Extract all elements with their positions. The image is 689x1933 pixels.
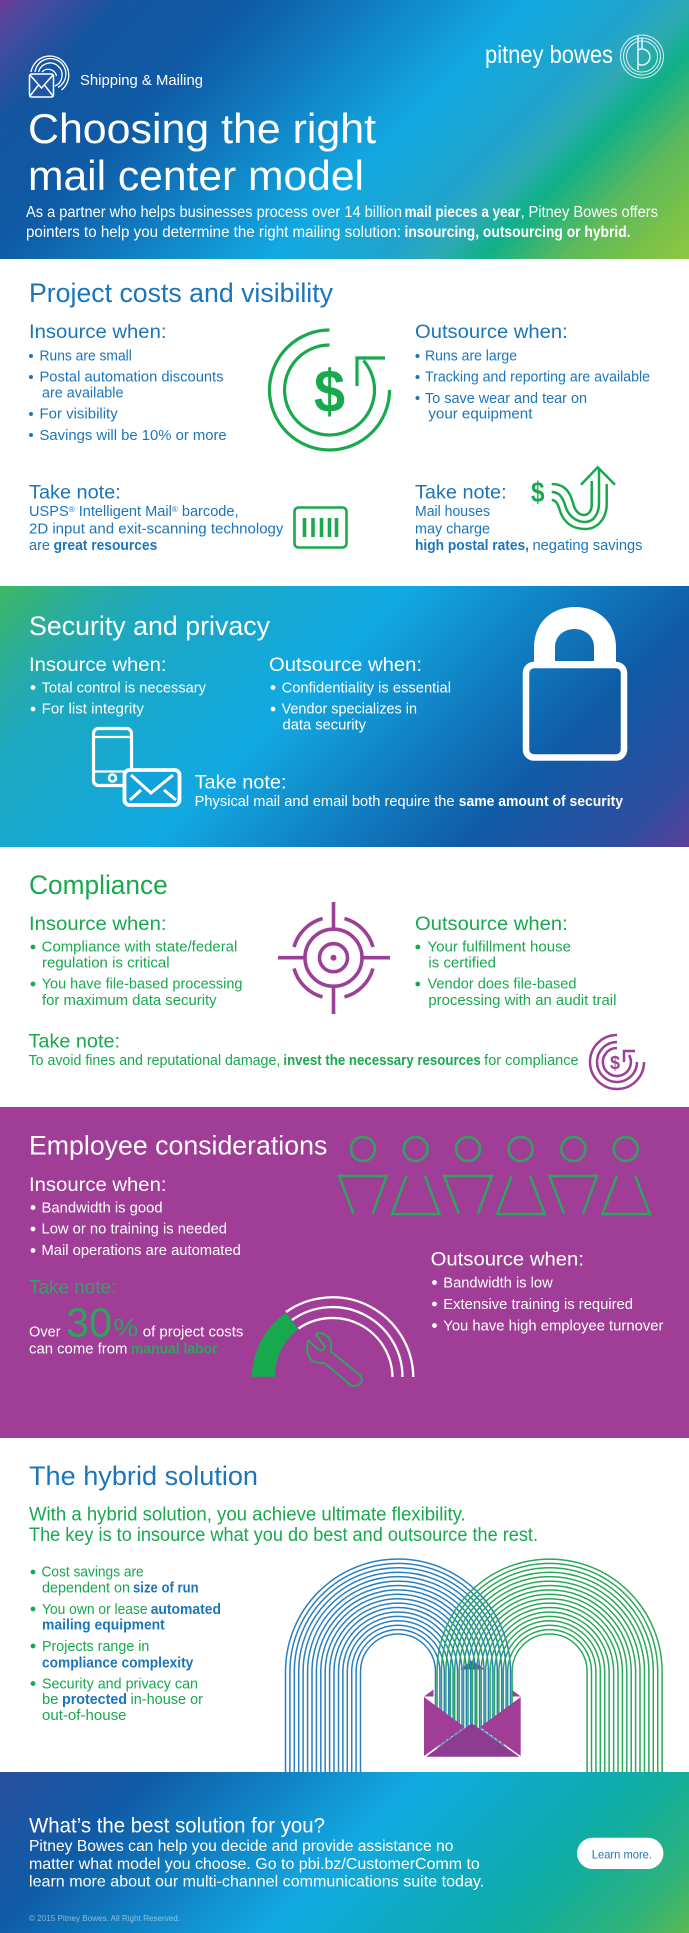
take note [195,771,623,810]
body text: learn more about our multi-channel communications suite today. [29,1874,484,1891]
intro text: As a partner who helps businesses process over 14 billion [26,204,402,221]
button: learn more [577,1838,663,1869]
take note: barcode: are [29,538,50,554]
take note: of project costs [143,1325,243,1341]
subheading [29,1505,538,1546]
insource column: Savings will be 10% or more [40,428,227,444]
insource column: For list integrity [42,702,145,718]
icon: envelope back flap [424,1660,521,1696]
take note: mail houses: may charge [415,521,490,537]
icon: dollar rings [590,1035,644,1089]
heading: Compliance [29,870,168,900]
take note: mail houses [415,482,642,554]
outsource column: Bandwidth is low [443,1275,553,1291]
take note: Take note: [29,1276,116,1298]
take note: barcode [29,482,284,554]
take note: mail houses: negating savings [532,538,642,554]
bullet list: size of run [133,1581,199,1597]
heading: The hybrid solution [29,1461,258,1491]
panel: header [0,0,689,259]
take note: Over [29,1325,61,1341]
take note: mail houses: high postal rates, [415,538,529,554]
outsource column: You have high employee turnover [443,1318,664,1334]
insource column: Insource when: [29,1174,166,1196]
take note: 30 [66,1300,112,1346]
title [28,105,376,199]
take note: barcode: Take note: [29,482,121,504]
insource column: Compliance with state/federal [42,940,237,956]
take note: mail houses: Mail houses [415,504,490,520]
copyright: © 2015 Pitney Bowes. All Right Reserved. [29,1913,180,1923]
outsource column: Outsource when: [269,654,422,676]
label: shipping and mailing: Shipping & Mailing [80,72,203,89]
outsource column: data security [282,717,367,733]
take note: Take note: [195,771,286,793]
icon: dollar with arrow: $ [531,477,544,509]
insource column [29,654,207,718]
panel: project costs and visibility [0,259,689,586]
insource column: Mail operations are automated [42,1243,241,1259]
bullet list: mailing equipment [42,1617,165,1633]
insource column: Runs are small [40,349,132,365]
bullet list: be [42,1692,58,1708]
icon: dollar with arrow [531,467,615,529]
body text: Pitney Bowes can help you decide and provide assistance no [29,1838,453,1855]
insource column [29,1174,241,1259]
take note: mail houses: Take note: [415,482,507,504]
heading: Project costs and visibility [29,278,334,308]
outsource column: Tracking and reporting are available [425,370,650,386]
bullet list: out-of-house [42,1708,126,1724]
icon: gauge with wrench [252,1297,413,1386]
body text [29,1838,484,1891]
panel: footer call to action [0,1772,689,1933]
subheading: With a hybrid solution, you achieve ultimate flexibility. [29,1505,466,1526]
bullet list: dependent on [42,1581,130,1597]
bullet list: automated [151,1602,221,1618]
outsource column: Outsource when: [431,1249,584,1271]
outsource column: Confidentiality is essential [282,680,451,696]
icon: dollar cycle: $ [314,358,345,425]
icon: barcode [294,508,346,548]
intro text: mail pieces a year [404,204,520,221]
outsource column: Vendor specializes in [282,702,417,718]
outsource column: is certified [428,955,496,971]
intro text: insourcing, outsourcing or hybrid. [404,224,630,241]
icon: phone and envelope [94,728,180,805]
bullet list: in-house or [130,1692,203,1708]
insource column: Bandwidth is good [42,1200,163,1216]
intro text: , [520,204,525,221]
button: learn more: Learn more. [592,1847,652,1861]
take note: for compliance [484,1053,579,1069]
insource column: Insource when: [29,654,166,676]
insource column: You have file-based processing [42,977,243,993]
outsource column: Extensive training is required [443,1297,633,1313]
insource column: For visibility [40,407,118,423]
take note: barcode: barcode, [178,504,239,520]
take note: can come from [29,1341,127,1357]
insource column: Insource when: [29,321,166,343]
panel: compliance [0,847,689,1107]
outsource column: Runs are large [425,349,517,365]
outsource column: Outsource when: [415,913,568,935]
take note: barcode: ® [69,505,75,514]
panel: the hybrid solution [0,1438,689,1772]
take note: barcode: 2D input and exit-scanning technology [29,521,284,537]
icon: envelope front [424,1697,521,1757]
outsource column: To save wear and tear on [425,391,587,407]
panel: security and privacy [0,586,689,847]
icon: envelope with signal rings [30,56,69,97]
insource column: are available [42,385,124,401]
insource column [29,913,242,1009]
bullet list: protected [62,1692,127,1708]
outsource column [431,1249,664,1334]
subheading: The key is to insource what you do best and outsource the rest. [29,1525,538,1546]
outsource column: Your fulfillment house [428,940,571,956]
title: Choosing the right [28,105,376,152]
outsource column [415,321,650,422]
insource column: for maximum data security [42,993,217,1009]
take note [28,1030,579,1069]
panel: employee considerations [0,1107,689,1438]
insource column: Total control is necessary [42,680,207,696]
icon: dollar rings: $ [610,1053,620,1073]
take note: same amount of security [459,794,623,810]
icon: target [278,902,390,1014]
take note: invest the necessary resources [283,1053,481,1069]
bullet list: You own or lease [42,1602,148,1618]
bullet list: Cost savings are [42,1565,144,1581]
intro text [26,204,658,241]
outsource column: your equipment [428,406,532,422]
bullet list: Projects range in [42,1639,149,1655]
insource column [29,321,227,444]
take note [29,1276,243,1357]
take note: % [113,1315,138,1343]
outsource column: processing with an audit trail [428,993,616,1009]
outsource column: Outsource when: [415,321,568,343]
blue arch [286,1559,510,1772]
take note: Physical mail and email both require the [195,794,455,810]
logo: pitney bowes: pitney bowes [485,41,613,69]
take note: barcode: great resources [54,538,157,554]
take note: barcode: Intelligent Mail [75,504,172,520]
take note: barcode: ® [172,505,178,514]
icon: dollar cycle [270,330,390,450]
bullet list: Security and privacy can [42,1676,198,1692]
insource column: Low or no training is needed [42,1222,227,1238]
green arch [437,1559,662,1772]
icon: lock [526,607,624,758]
icon: row of people [339,1137,650,1214]
heading: What’s the best solution for you? [29,1814,325,1837]
take note: To avoid fines and reputational damage, [28,1053,280,1069]
heading: Security and privacy [29,611,271,641]
take note: barcode: USPS [29,504,68,520]
outsource column [415,913,616,1009]
intro text: Pitney Bowes offers [528,204,658,221]
intro text: pointers to help you determine the right mailing solution: [26,224,401,241]
take note: Take note: [28,1030,120,1052]
take note: manual labor [131,1341,218,1357]
logo: pitney bowes [485,35,664,78]
insource column: Insource when: [29,913,166,935]
outsource column [269,654,451,733]
body text: matter what model you choose. Go to pbi.bz/CustomerComm to [29,1856,480,1873]
insource column: Postal automation discounts [40,370,224,386]
insource column: regulation is critical [42,955,170,971]
bullet list: compliance complexity [42,1655,193,1671]
illustration: overlapping arches and envelope [286,1559,662,1772]
outsource column: Vendor does file-based [428,977,576,993]
heading: Employee considerations [29,1130,327,1160]
title: mail center model [28,152,364,199]
bullet list [31,1565,221,1724]
